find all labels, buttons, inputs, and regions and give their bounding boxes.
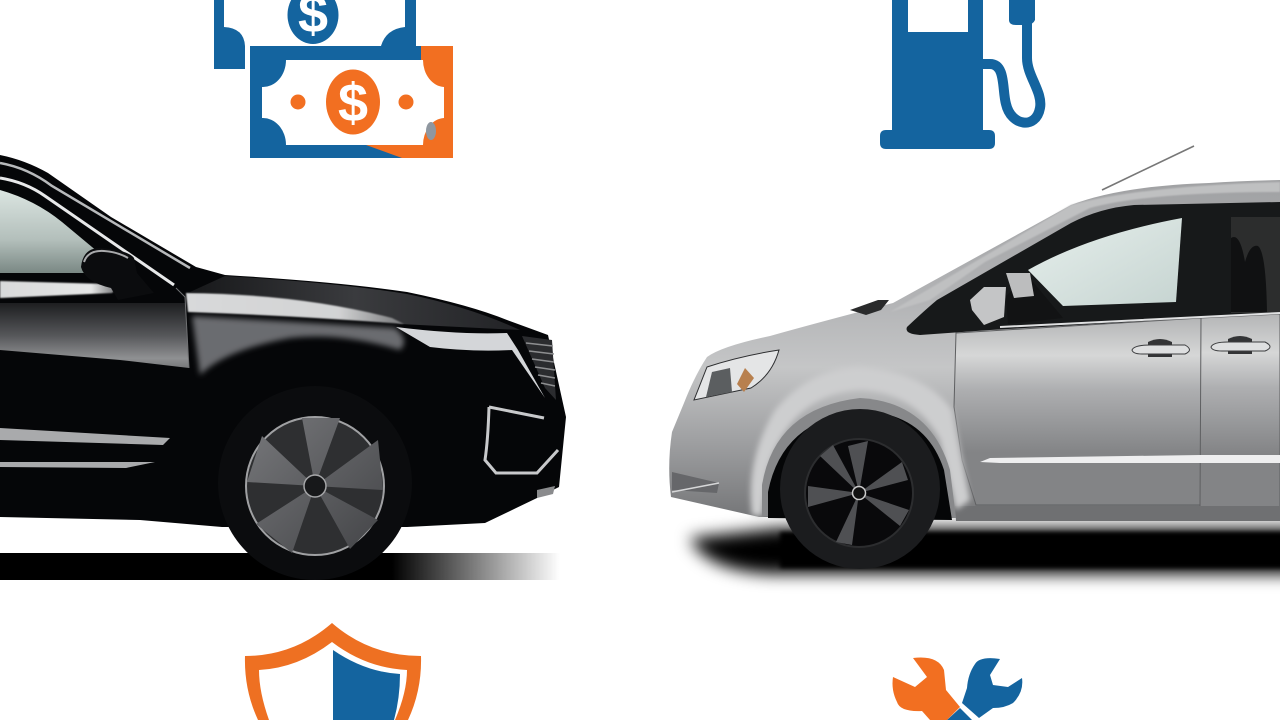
icon: shield [245,623,421,720]
SUV body [0,155,566,527]
fog lamp surround [485,407,558,473]
front bill: $ [338,73,368,133]
fender and hood highlight [186,293,404,324]
back bill [214,0,416,69]
bumper lip [537,486,555,498]
wheel arch inner band [762,398,956,518]
wheel tyre [780,409,940,569]
door handle rear [1211,336,1270,354]
headlight [694,350,779,400]
antenna [1102,146,1194,190]
lower sill [955,506,1280,521]
roof side reflection [890,182,1280,312]
lower chrome strip [0,428,170,445]
door handle front [1132,339,1190,357]
wheel arch [768,411,952,520]
van body [669,180,1280,521]
ground shadow [690,528,1280,574]
side mirror [970,273,1063,325]
hood top surface [190,276,520,330]
wheel rim [246,417,384,555]
wheel rim [805,439,913,547]
icon: fuel pump [880,0,1040,149]
front window glass [1028,218,1182,306]
fender light band [751,367,970,516]
headlight [396,327,545,398]
icon: crossed wrenches [892,658,1022,720]
icon: money bills [214,0,453,158]
side mirror [81,248,154,300]
rear window [1231,217,1280,313]
sill chrome strip [0,462,155,468]
window surround [907,202,1280,335]
sliding door panel [1200,314,1280,508]
grille [522,336,556,400]
door reflection panel [0,303,189,368]
front door shut line [176,288,189,368]
ground shadow [0,553,560,580]
door sill reflection [0,281,114,298]
fog vent [672,472,719,493]
hood vent [850,300,889,315]
car: black SUV [0,155,566,580]
car: silver minivan [669,146,1280,574]
fender reflection [192,316,404,375]
body side strip [980,455,1280,463]
roof chrome strips [0,178,174,285]
wheel tyre [218,386,412,580]
side window glass [0,190,110,273]
front bill [250,46,453,158]
belt chrome line [1000,313,1280,327]
front door panel [954,318,1201,505]
